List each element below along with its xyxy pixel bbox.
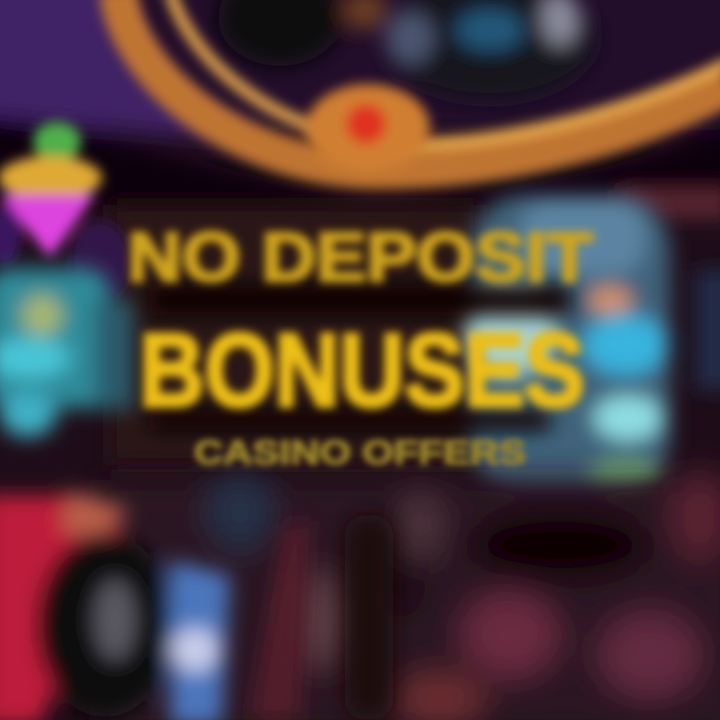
figure: standing person [250,515,393,720]
panel: ceiling [0,0,720,465]
icon: left lamp [0,122,130,304]
icon: right slot machine [465,195,720,495]
subtitle: CASINO OFFERS [194,434,526,472]
icon: left slot machine [0,268,133,437]
icon: golden ring [118,0,720,170]
panel: ring interior [218,0,595,100]
icon: red ornament [306,84,430,172]
title shadow [150,285,570,430]
icon: red chair and wheel [0,490,230,720]
title line: no deposit: NO DEPOSIT [128,218,592,296]
panel: crowd [100,470,720,720]
title line: bonuses: BONUSES [140,313,584,429]
